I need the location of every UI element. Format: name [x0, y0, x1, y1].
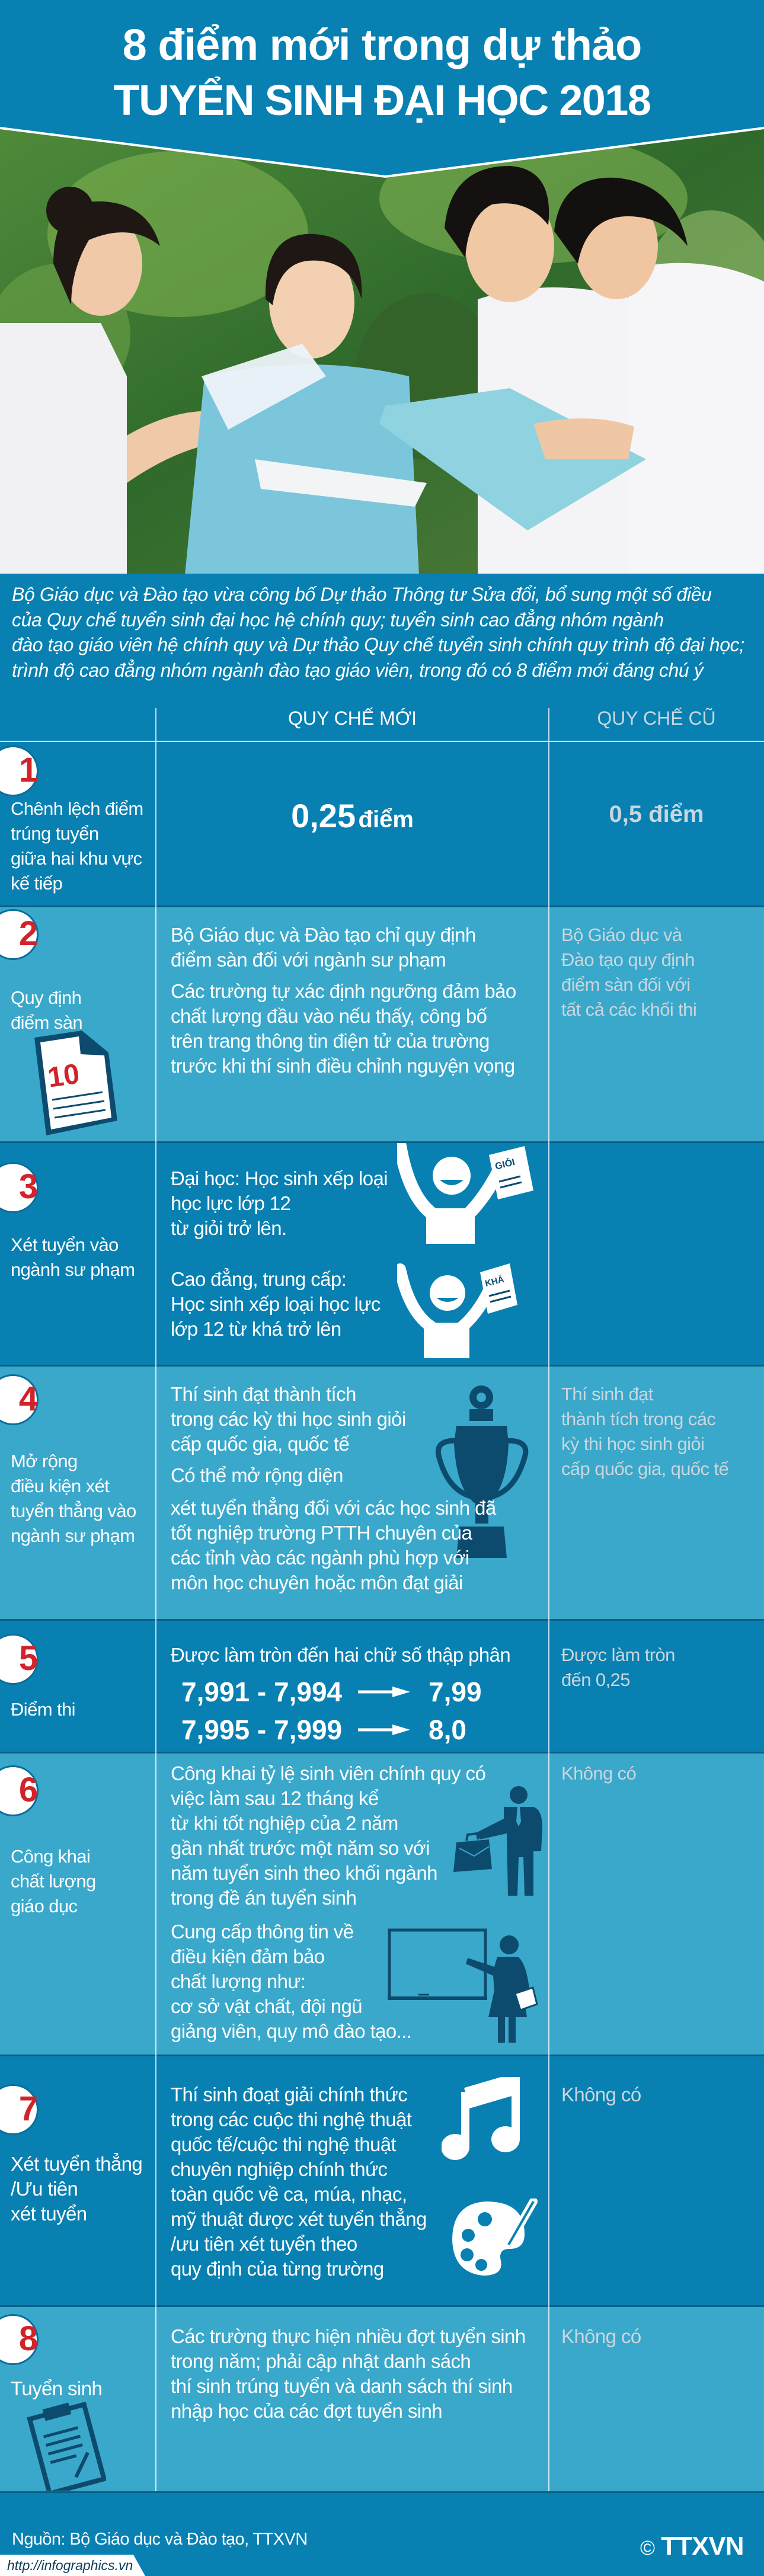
row 2: 2 [19, 914, 38, 953]
rounding examples: 7,991 - 7,994 [181, 1676, 342, 1707]
row 7: /Ưu tiên [11, 2178, 78, 2200]
row 1: 1 [19, 751, 38, 789]
intro panel [0, 574, 764, 741]
row 1: 0,25 điểm [291, 797, 414, 834]
row 6: cơ sở vật chất, đội ngũ [171, 1995, 362, 2017]
row 5: Được làm tròn đến hai chữ số thập phân [171, 1644, 510, 1666]
logo: © TTXVN [640, 2532, 744, 2561]
person 3 [478, 287, 634, 575]
row 7: quy định của từng trường [171, 2258, 384, 2280]
column header: QUY CHẾ CŨ [597, 708, 716, 729]
row 2: Các trường tự xác định ngưỡng đảm bảo [171, 980, 516, 1002]
icon: clipboard [27, 2402, 106, 2491]
column header [288, 708, 716, 729]
url tab: http://infographics.vn [7, 2558, 133, 2573]
row 3 [0, 1141, 764, 1365]
icon: businessman [453, 1786, 542, 1896]
row 3: Xét tuyển vào [11, 1234, 119, 1255]
row 8: Tuyển sinh [11, 2377, 102, 2399]
row 6: Cung cấp thông tin về [171, 1921, 353, 1943]
intro text: đào tạo giáo viên hệ chính quy và Dự thảo Quy chế tuyển sinh chính quy trình độ đại học; [12, 634, 744, 655]
icon: student GIỎI [397, 1143, 533, 1244]
row 3: ngành sư phạm [11, 1259, 135, 1280]
icon: palette [452, 2199, 538, 2276]
row 4 [0, 1365, 764, 1619]
row 4: Mở rộng [11, 1451, 78, 1471]
row 5: Điểm thi [11, 1699, 75, 1720]
row 7: mỹ thuật được xét tuyển thẳng [171, 2208, 427, 2230]
row 3: Cao đẳng, trung cấp: [171, 1268, 346, 1290]
row 7: Xét tuyển thẳng [11, 2153, 142, 2175]
intro text [12, 584, 744, 680]
row 8 [0, 2305, 764, 2491]
row 7 [0, 2055, 764, 2305]
intro text: trình độ cao đẳng nhóm ngành đào tạo giáo viên, trong đó có 8 điểm mới đáng chú ý [12, 659, 703, 680]
row 8: thí sinh trúng tuyển và danh sách thí sinh [171, 2375, 513, 2397]
row 4: điều kiện xét [11, 1476, 109, 1496]
row 2: trên trang thông tin điện tử của trường [171, 1030, 490, 1052]
row 6: Công khai tỷ lệ sinh viên chính quy có [171, 1762, 485, 1784]
row 4: cấp quốc gia, quốc tế [171, 1433, 349, 1455]
rounding examples: 8,0 [429, 1714, 466, 1745]
row 3: từ giỏi trở lên. [171, 1217, 287, 1239]
row 6: năm tuyển sinh theo khối ngành [171, 1862, 437, 1884]
row 4: thành tích trong các [561, 1409, 715, 1429]
row 2: tất cả các khối thi [561, 999, 696, 1020]
row 6: việc làm sau 12 tháng kể [171, 1787, 379, 1809]
row 6: chất lượng [11, 1871, 96, 1892]
row 4: kỳ thi học sinh giỏi [561, 1433, 704, 1454]
title [114, 20, 650, 124]
arrow [358, 1687, 410, 1735]
column header: QUY CHẾ MỚI [288, 708, 417, 729]
rounding examples: 7,99 [429, 1676, 482, 1707]
row 4: cấp quốc gia, quốc tế [561, 1458, 728, 1479]
row 1: 0,5 điểm [609, 801, 704, 827]
row 4: Có thể mở rộng diện [171, 1464, 343, 1486]
rounding examples [181, 1676, 482, 1745]
row 2 [0, 905, 764, 1141]
row 2: Bộ Giáo dục và Đào tạo chỉ quy định [171, 924, 476, 946]
intro text: của Quy chế tuyển sinh đại học hệ chính quy; tuyển sinh cao đẳng nhóm ngành [12, 609, 664, 631]
row 2: Quy định [11, 987, 81, 1008]
row 7: quốc tế/cuộc thi nghệ thuật [171, 2133, 396, 2155]
row 3: học lực lớp 12 [171, 1192, 290, 1214]
icon: student KHÁ: KHÁ [484, 1274, 505, 1289]
icon: teacher at board [388, 1928, 538, 2043]
row 4: tốt nghiệp trường PTTH chuyên của [171, 1522, 472, 1544]
row 6: Công khai [11, 1846, 90, 1867]
row 4: tuyển thẳng vào [11, 1500, 136, 1521]
row 6: Không có [561, 1763, 636, 1784]
row 3: Học sinh xếp loại học lực [171, 1293, 381, 1315]
intro text: Bộ Giáo dục và Đào tạo vừa công bố Dự thảo Thông tư Sửa đổi, bổ sung một số điều [12, 584, 712, 605]
row 7: toàn quốc về ca, múa, nhạc, [171, 2183, 407, 2205]
row 4: các tỉnh vào các ngành phù hợp với [171, 1547, 469, 1569]
row 8: Các trường thực hiện nhiều đợt tuyển sinh [171, 2325, 526, 2347]
footer [0, 2491, 764, 2574]
row 7: xét tuyển [11, 2203, 87, 2225]
title: 8 điểm mới trong dự thảo [123, 20, 641, 69]
row 1: giữa hai khu vực [11, 848, 142, 869]
column dividers [155, 708, 156, 2491]
row 1: Chênh lệch điểm [11, 798, 143, 819]
row 4: trong các kỳ thi học sinh giỏi [171, 1408, 406, 1430]
row 6: giáo dục [11, 1896, 77, 1916]
icon: student KHÁ [397, 1263, 517, 1358]
row 7: trong các cuộc thi nghệ thuật [171, 2108, 411, 2130]
person 1 [0, 323, 127, 575]
rounding examples: 7,995 - 7,999 [181, 1714, 342, 1745]
icon: score sheet 10: 10 [46, 1058, 81, 1094]
row 2: điểm sàn đối với [561, 974, 690, 995]
row 1 [0, 742, 764, 905]
row 6: 6 [19, 1771, 38, 1809]
icon: score sheet 10 [34, 1031, 117, 1135]
row 2: Bộ Giáo dục và [561, 924, 682, 945]
icon: student GIỎI: GIỎI [494, 1156, 516, 1172]
row 5: 5 [19, 1639, 38, 1678]
row 7: Không có [561, 2084, 641, 2105]
person 4 [628, 263, 764, 575]
row 7: /ưu tiên xét tuyển theo [171, 2233, 357, 2255]
row 6: chất lượng như: [171, 1970, 305, 1992]
row 7: Thí sinh đoạt giải chính thức [171, 2084, 407, 2105]
row 2: trước khi thí sinh điều chỉnh nguyện vọng [171, 1055, 514, 1077]
icon: music note [442, 2077, 520, 2160]
row 3: Đại học: Học sinh xếp loại [171, 1167, 388, 1189]
row 5: Được làm tròn [561, 1644, 675, 1665]
row 6: gần nhất trước một năm so với [171, 1837, 430, 1859]
row 2: điểm sàn đối với ngành sư phạm [171, 949, 446, 971]
row 6: trong đề án tuyển sinh [171, 1887, 356, 1909]
row 1: kế tiếp [11, 873, 62, 894]
url tab [0, 2555, 145, 2576]
photo [0, 129, 764, 574]
row 4: Thí sinh đạt thành tích [171, 1383, 356, 1405]
row 6: giảng viên, quy mô đào tạo... [171, 2020, 411, 2042]
source text: Nguồn: Bộ Giáo dục và Đào tạo, TTXVN [12, 2530, 308, 2549]
row 4: Thí sinh đạt [561, 1384, 653, 1404]
row 6 [0, 1752, 764, 2055]
row 4: 4 [19, 1380, 38, 1418]
row 8: Không có [561, 2325, 641, 2347]
row 7: chuyên nghiệp chính thức [171, 2158, 387, 2180]
row 2: điểm sàn [11, 1012, 82, 1033]
row 8: nhập học của các đợt tuyển sinh [171, 2400, 442, 2422]
row 4: xét tuyển thẳng đối với các học sinh đã [171, 1497, 496, 1519]
row 2: chất lượng đầu vào nếu thấy, công bố [171, 1005, 487, 1027]
row 7: 7 [19, 2089, 38, 2128]
row 4: môn học chuyên hoặc môn đạt giải [171, 1572, 463, 1593]
row 5 [0, 1619, 764, 1752]
row 6: điều kiện đảm bảo [171, 1945, 325, 1967]
icon: trophy [435, 1385, 529, 1558]
row 6: từ khi tốt nghiệp của 2 năm [171, 1812, 398, 1834]
row 1: trúng tuyển [11, 823, 99, 844]
row 3: lớp 12 từ khá trở lên [171, 1318, 341, 1340]
person 2 [185, 364, 419, 575]
row 3: 3 [19, 1167, 38, 1206]
row 8: 8 [19, 2319, 38, 2358]
blue folder [379, 388, 646, 530]
row 8: trong năm; phải cập nhật danh sách [171, 2350, 471, 2372]
row 2: Đào tạo quy định [561, 949, 695, 970]
row 5: đến 0,25 [561, 1669, 630, 1690]
title: TUYỂN SINH ĐẠI HỌC 2018 [114, 77, 650, 124]
title banner [0, 127, 764, 178]
row 4: ngành sư phạm [11, 1525, 135, 1546]
